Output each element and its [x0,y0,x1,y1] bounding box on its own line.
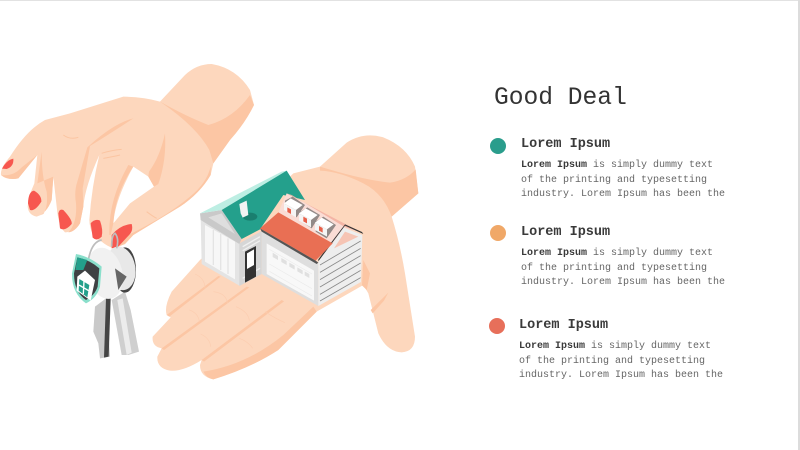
entrance wall [239,231,262,286]
item 1 text: Lorem Ipsum is simply dummy text of the printing and typesetting industry. Lorem Ipsum has been the [521,160,725,200]
left wing wall [201,217,240,286]
icon: isometric house [200,171,363,306]
item 1 heading: Lorem Ipsum [521,137,610,152]
red roof [260,212,333,261]
chimney [243,213,257,221]
lower hand holding the house [153,135,418,379]
pink upper roof [278,193,363,243]
upper hand holding the keys [1,64,254,248]
item 3 text: Lorem Ipsum is simply dummy text of the printing and typesetting industry. Lorem Ipsum has been the [519,341,723,381]
title: Good Deal [494,85,627,112]
dormers [285,197,336,238]
item 2 heading: Lorem Ipsum [521,225,610,240]
bullet: coral [489,318,505,334]
icon: keys with house fob [72,233,139,358]
bullet: orange [490,225,506,241]
nails [2,159,132,248]
garage wall [262,231,318,306]
bullet: teal [490,138,506,154]
teal roof [222,171,305,239]
right wall with siding [318,227,362,306]
item 2 text: Lorem Ipsum is simply dummy text of the printing and typesetting industry. Lorem Ipsum has been the [521,248,725,288]
item 3 heading: Lorem Ipsum [519,318,608,333]
roof back edge [200,171,287,213]
